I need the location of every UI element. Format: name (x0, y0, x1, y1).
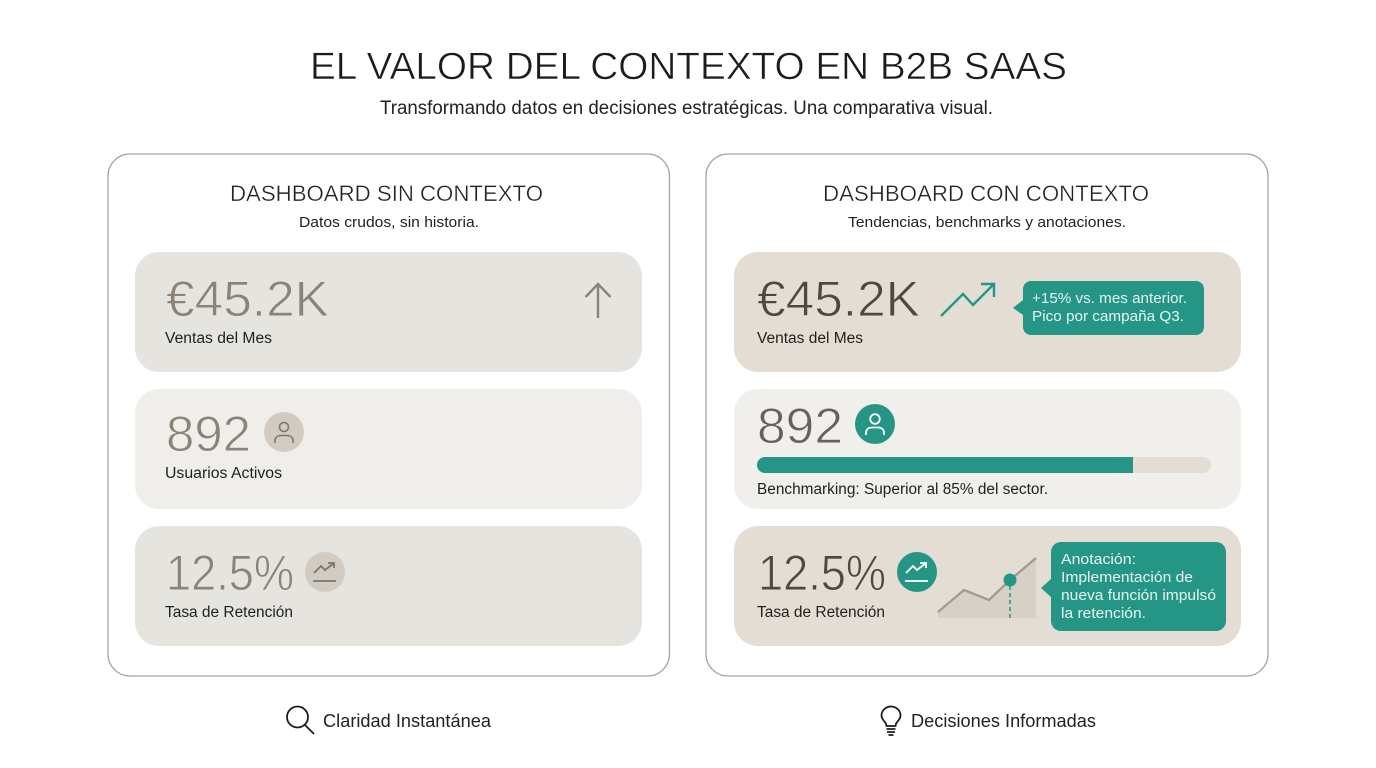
value: 892 (757, 398, 843, 454)
callout: variación mensual (1013, 281, 1204, 335)
panel subheading: Datos crudos, sin historia. (299, 214, 479, 231)
callout: variación mensual: +15% vs. mes anterior. (1032, 291, 1187, 307)
icon: user (855, 404, 895, 444)
label: Ventas del Mes (757, 330, 863, 347)
value: 12.5% (166, 545, 294, 601)
callout: variación mensual: Pico por campaña Q3. (1032, 309, 1184, 325)
label: Tasa de Retención (757, 604, 885, 621)
callout: anotación: nueva función impulsó (1061, 588, 1216, 604)
callout: anotación: Anotación: (1061, 552, 1136, 568)
panel heading: DASHBOARD CON CONTEXTO (823, 181, 1149, 206)
icon: trend (305, 552, 345, 592)
panel heading: DASHBOARD SIN CONTEXTO (230, 181, 543, 206)
card: usuarios con contexto (734, 389, 1241, 509)
footer: claridad instantánea (287, 706, 492, 734)
callout: anotación: la retención. (1061, 606, 1146, 622)
icon: up arrow (586, 284, 610, 318)
footer label: Decisiones Informadas (911, 711, 1096, 731)
card: ventas con contexto (734, 252, 1241, 372)
card: ventas sin contexto (135, 252, 642, 372)
panel: dashboard con contexto (706, 154, 1268, 676)
value: €45.2K (757, 271, 920, 327)
label: Tasa de Retención (165, 604, 293, 621)
label: Ventas del Mes (165, 330, 272, 347)
benchmark progress bar (757, 457, 1211, 473)
annotated line chart (938, 558, 1036, 618)
card: retención con contexto (734, 526, 1241, 646)
callout: anotación (1041, 542, 1226, 631)
icon: trend (897, 552, 937, 592)
value: €45.2K (166, 271, 329, 327)
card: usuarios sin contexto (135, 389, 642, 509)
footer label: Claridad Instantánea (323, 711, 492, 731)
panel subheading: Tendencias, benchmarks y anotaciones. (848, 214, 1126, 231)
label: Benchmarking: Superior al 85% del sector. (757, 481, 1048, 498)
card: retención sin contexto (135, 526, 642, 646)
icon: user (264, 412, 304, 452)
icon: magnifier (287, 706, 314, 734)
label: Usuarios Activos (165, 465, 282, 482)
value: 12.5% (758, 545, 886, 601)
icon: trend arrow (941, 284, 994, 316)
footer: decisiones informadas (882, 706, 1096, 735)
title: EL VALOR DEL CONTEXTO EN B2B SAAS (310, 46, 1067, 88)
icon: light bulb (882, 706, 900, 735)
panel: dashboard sin contexto (108, 154, 670, 676)
value: 892 (166, 406, 251, 462)
callout: anotación: Implementación de (1061, 570, 1193, 586)
subtitle: Transformando datos en decisiones estratégicas. Una comparativa visual. (380, 98, 993, 119)
